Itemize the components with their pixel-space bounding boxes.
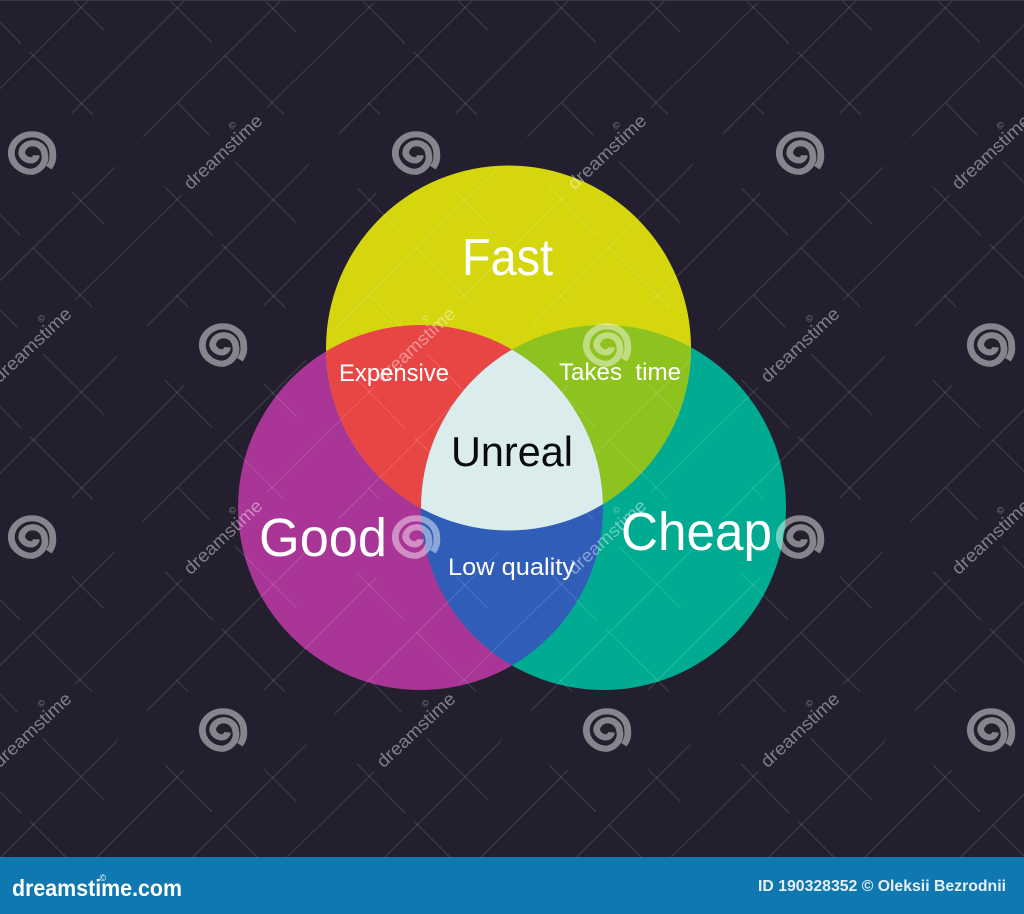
watermark text: © bbox=[804, 697, 816, 709]
label: fast: Fast bbox=[462, 229, 553, 287]
watermark text: dreamstime bbox=[564, 111, 650, 193]
watermark text: © bbox=[995, 504, 1007, 516]
circle: good bbox=[238, 325, 603, 690]
overlap: low quality bbox=[421, 350, 603, 666]
label: good: Good bbox=[259, 508, 387, 568]
overlap: expensive bbox=[326, 325, 512, 508]
label: unreal: Unreal bbox=[451, 428, 573, 475]
overlap: unreal bbox=[421, 350, 603, 530]
watermark text: © bbox=[420, 697, 432, 709]
watermark text: © bbox=[420, 312, 432, 324]
watermark text: dreamstime bbox=[757, 304, 843, 386]
watermark text: © bbox=[804, 312, 816, 324]
label: cheap: Cheap bbox=[621, 502, 772, 562]
watermark text: dreamstime bbox=[373, 689, 459, 771]
overlap: takes time bbox=[421, 325, 691, 504]
watermark text: © bbox=[36, 312, 48, 324]
watermark text: © bbox=[611, 504, 623, 516]
label: low quality: Low quality bbox=[448, 554, 575, 581]
watermark text: © bbox=[995, 119, 1007, 131]
circle: fast bbox=[326, 166, 691, 530]
footer logo: © bbox=[100, 873, 107, 883]
watermark text: © bbox=[227, 119, 239, 131]
label: takes time: Takes time bbox=[559, 359, 681, 386]
label: expensive: Expensive bbox=[339, 360, 449, 387]
circle: cheap bbox=[421, 325, 786, 690]
watermark text: dreamstime bbox=[180, 111, 266, 193]
footer logo: dreamstime.com bbox=[12, 875, 182, 901]
watermark text: dreamstime bbox=[180, 496, 266, 578]
watermark text: dreamstime bbox=[373, 304, 459, 386]
watermark text bbox=[0, 105, 1024, 771]
watermark text: © bbox=[611, 119, 623, 131]
venn diagram bbox=[238, 166, 786, 690]
watermark text: © bbox=[227, 504, 239, 516]
watermark text: dreamstime bbox=[757, 689, 843, 771]
watermark text: dreamstime bbox=[564, 496, 650, 578]
watermark text: © bbox=[36, 697, 48, 709]
watermark spirals bbox=[11, 134, 1012, 749]
footer credit: ID 190328352 © Oleksii Bezrodnii bbox=[758, 878, 1006, 895]
footer bar bbox=[0, 857, 1024, 914]
